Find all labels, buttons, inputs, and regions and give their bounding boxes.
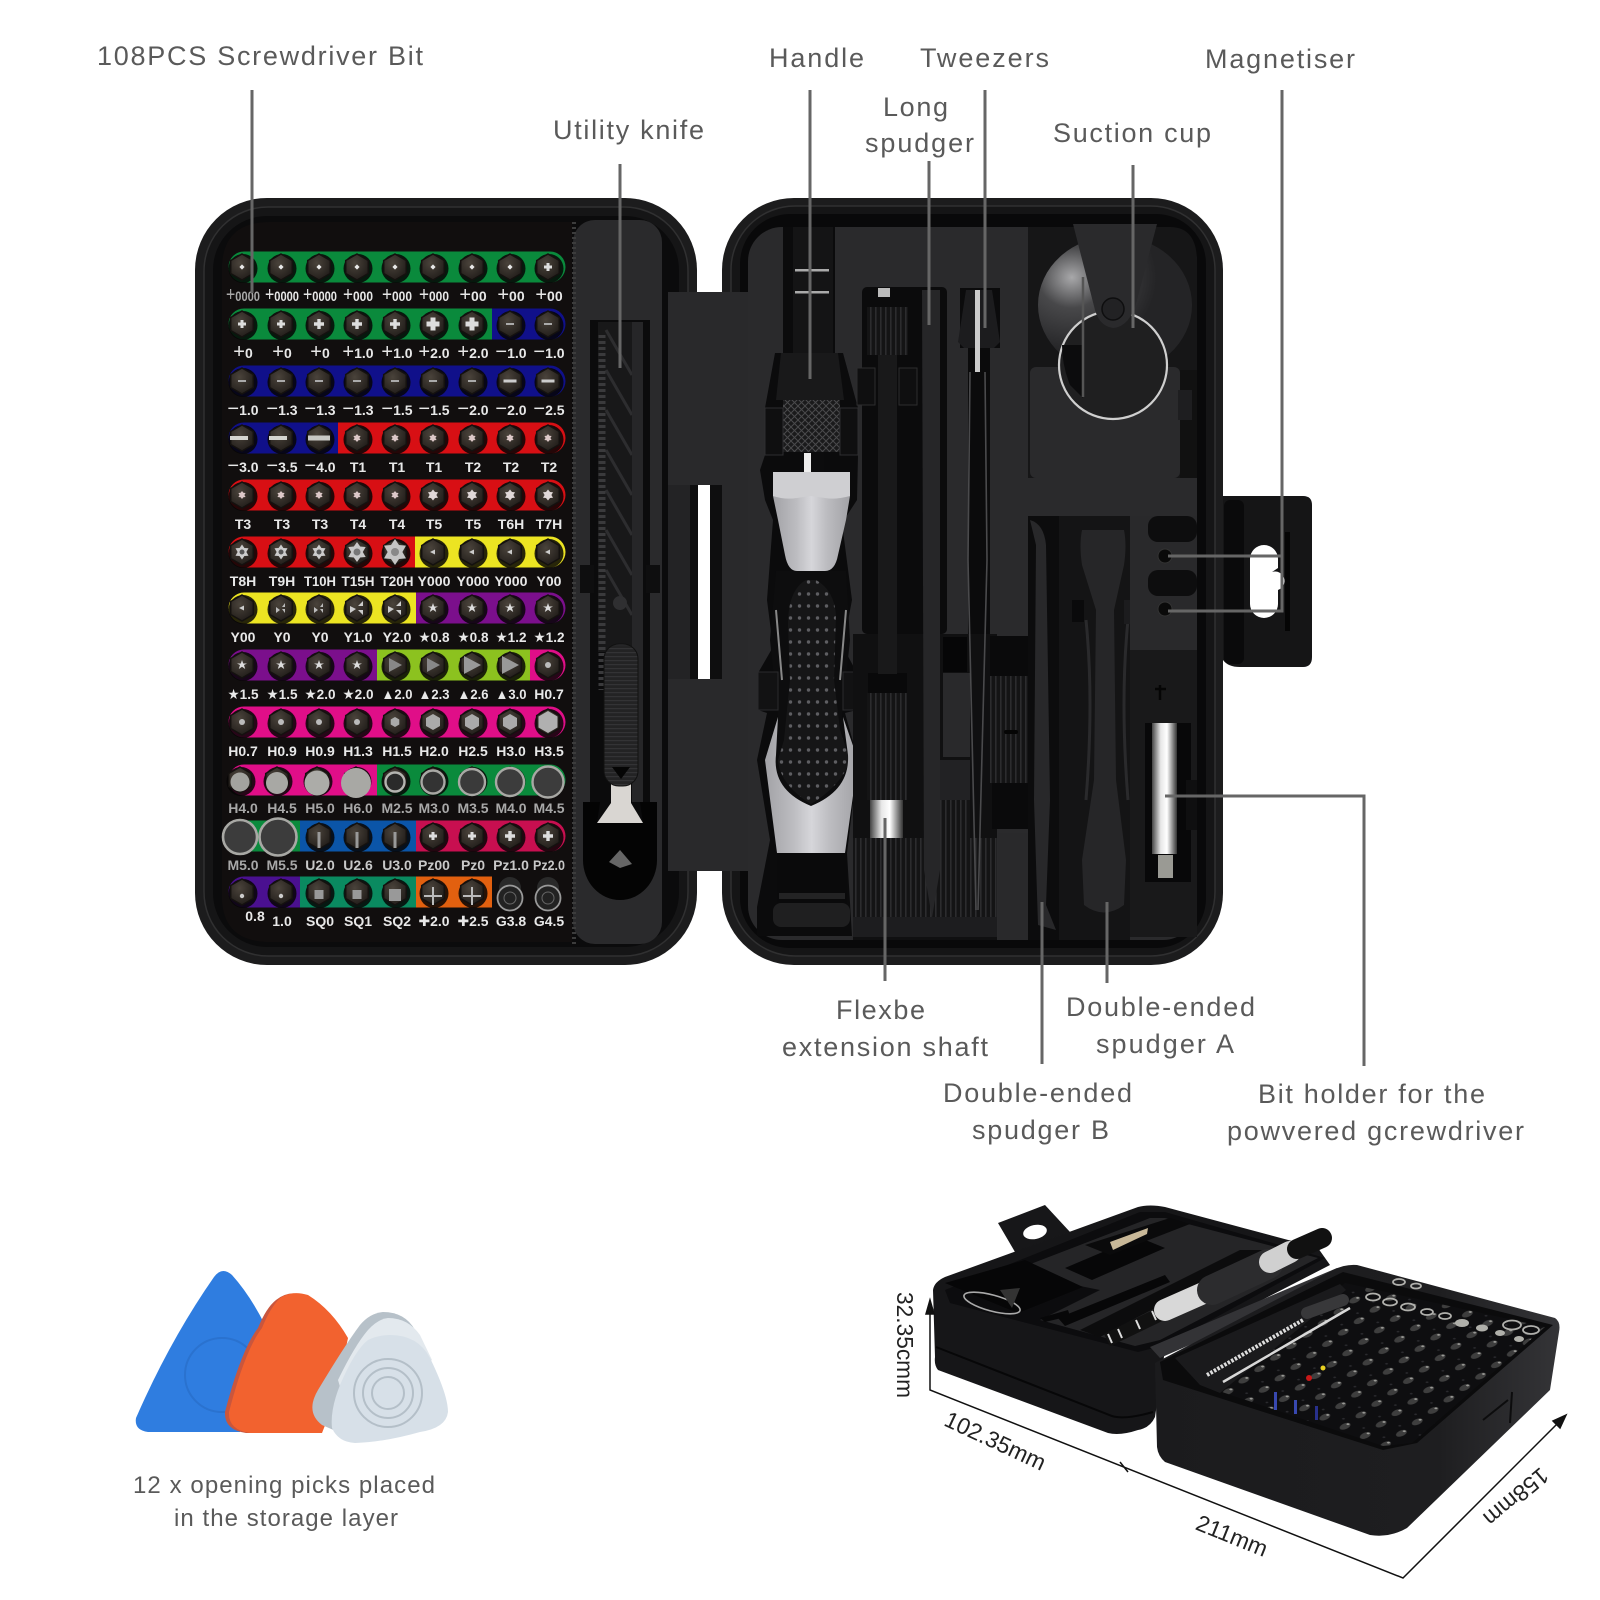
screwdriver pocket [757, 227, 858, 936]
dimension: depth left: 102.35mm [941, 1406, 1050, 1475]
bit size labels: T4 [350, 516, 366, 532]
bit size labels: T1 [389, 459, 405, 475]
spudger A pocket [1059, 516, 1138, 940]
bit size labels: −1.3 [266, 398, 298, 420]
bit size labels: +2.0 [457, 341, 489, 363]
bit size labels: −1.0 [227, 398, 259, 420]
bit size labels: +00 [497, 284, 525, 306]
label: long spudger: Long [883, 92, 948, 122]
bit size labels: ★1.5 [266, 686, 298, 702]
bit size labels: +1.0 [381, 341, 413, 363]
bit size labels: U3.0 [382, 857, 412, 873]
bit size labels: T1 [426, 459, 442, 475]
bit size labels: ▲2.3 [418, 686, 450, 702]
bit size labels: Y00 [537, 573, 562, 589]
icon: opening picks [136, 1271, 448, 1443]
panel: left case (bit tray) [195, 198, 697, 965]
bit size labels: −1.5 [418, 398, 450, 420]
bit size labels: G4.5 [534, 913, 564, 929]
suction cup compartment [1028, 224, 1197, 516]
dimension: height: 32.35cmm [892, 1292, 918, 1398]
bit size labels: M3.5 [457, 800, 489, 816]
bit size labels: −3.5 [266, 455, 298, 477]
bit size labels: +00 [535, 284, 563, 306]
bit size labels: ✚2.0 [418, 913, 450, 929]
bit size labels: Pz00 [418, 857, 450, 873]
bit size labels: T2 [465, 459, 481, 475]
mid column pockets [990, 636, 1028, 940]
bit size labels [226, 284, 565, 929]
bit size labels: −1.3 [304, 398, 336, 420]
bit heads [223, 254, 564, 910]
bit size labels: −1.0 [533, 341, 565, 363]
bit size labels: T6H [498, 516, 524, 532]
bit size labels: +0 [233, 341, 253, 363]
label: magnetiser: Magnetiser [1205, 44, 1355, 74]
bit size labels: H0.9 [305, 743, 335, 759]
bit size labels: ★1.2 [496, 629, 527, 645]
bit size labels: M5.0 [227, 857, 259, 873]
bit size labels: H4.0 [228, 800, 258, 816]
bit size labels: T3 [274, 516, 290, 532]
bit size labels: Y00 [231, 629, 256, 645]
bit size labels: M4.5 [533, 800, 565, 816]
bit size labels: −1.5 [381, 398, 413, 420]
label: bit holder: Bit holder for the [1258, 1079, 1485, 1109]
bit size labels: H3.0 [496, 743, 526, 759]
bit size labels: +000 [382, 284, 412, 306]
dimension: depth right: 158mm [1478, 1463, 1554, 1532]
flexible shaft and long spudger pocket [853, 287, 997, 940]
caption: opening picks: 12 x opening picks placed [133, 1472, 435, 1499]
bit size labels: −1.0 [495, 341, 527, 363]
label: long spudger [865, 92, 974, 158]
bit size labels: Y1.0 [344, 629, 373, 645]
bit size labels: Y000 [418, 573, 451, 589]
label: bit holder: powvered gcrewdriver [1227, 1116, 1524, 1146]
bit size labels: −2.0 [495, 398, 527, 420]
bit size labels: +0000 [265, 284, 299, 306]
spudger B pocket [1028, 516, 1059, 940]
label: flexible extension shaft [782, 995, 988, 1062]
bit size labels: H1.5 [382, 743, 412, 759]
bit size labels: ✚2.5 [458, 913, 489, 929]
bit size labels: ★2.0 [342, 686, 374, 702]
screwdriver handle [758, 227, 858, 927]
bit size labels: +000 [343, 284, 373, 306]
label: bit set: 108PCS Screwdriver Bit [97, 41, 423, 71]
bit size labels: Y2.0 [383, 629, 412, 645]
bit size labels: SQ0 [306, 913, 334, 929]
bit size labels: −1.3 [342, 398, 374, 420]
bit size labels: U2.0 [305, 857, 335, 873]
label: utility knife: Utility knife [553, 115, 704, 145]
bit size labels: ★0.8 [458, 629, 489, 645]
bit size labels: T5 [465, 516, 481, 532]
label: flexible extension shaft: Flexbe [836, 995, 925, 1025]
bit size labels: M3.0 [418, 800, 450, 816]
bit size labels: T1 [350, 459, 366, 475]
bit size labels: +000 [419, 284, 449, 306]
bit size labels: SQ2 [383, 913, 411, 929]
bit size labels: Pz2.0 [533, 857, 565, 873]
bit size labels: T10H [304, 573, 336, 589]
bit size labels: −3.0 [227, 455, 259, 477]
bit size labels: +1.0 [342, 341, 374, 363]
bit size labels: ▲2.0 [382, 686, 413, 702]
bit size labels: ★0.8 [418, 629, 450, 645]
bit size labels: H1.3 [343, 743, 373, 759]
bit size labels: +00 [459, 284, 487, 306]
magnetiser panel [1130, 516, 1197, 650]
label: spudger A: Double-ended [1066, 992, 1255, 1022]
hanging tag [1223, 496, 1312, 667]
callout lines [252, 90, 1364, 1066]
bit size labels: U2.6 [343, 857, 373, 873]
bit size labels: +0 [310, 341, 330, 363]
bit size labels: H2.0 [419, 743, 449, 759]
colour bands behind the bits [228, 252, 565, 908]
bit size labels: Y0 [273, 629, 291, 645]
bit size labels: 1.0 [272, 913, 292, 929]
bit size labels: H6.0 [343, 800, 373, 816]
bit size labels: ★1.2 [534, 629, 565, 645]
bit size labels: +0000 [303, 284, 337, 306]
bit size labels: H2.5 [458, 743, 488, 759]
caption: opening picks: in the storage layer [174, 1505, 398, 1532]
bit size labels: Pz1.0 [493, 857, 529, 873]
bit size labels: T2 [503, 459, 519, 475]
bit size labels: H5.0 [305, 800, 335, 816]
label: flexible extension shaft: extension shaft [782, 1032, 988, 1062]
bit size labels: T8H [230, 573, 256, 589]
bit holder [1130, 650, 1197, 937]
bit size labels: T9H [269, 573, 295, 589]
bit size labels: ★2.0 [304, 686, 336, 702]
utility knife in its pocket [580, 320, 660, 900]
label: tweezers: Tweezers [920, 43, 1049, 73]
bit size labels: H0.7 [228, 743, 258, 759]
bit size labels: T20H [380, 573, 414, 589]
caption: opening picks [133, 1472, 435, 1532]
panel: right case (tool tray) [722, 198, 1223, 965]
bit size labels: H4.5 [267, 800, 297, 816]
bit size labels: T7H [536, 516, 562, 532]
bit size labels: T2 [541, 459, 557, 475]
label: bit holder [1227, 1079, 1524, 1146]
label: suction cup: Suction cup [1053, 118, 1211, 148]
label: spudger B: Double-ended [943, 1078, 1132, 1108]
bit size labels: T5 [426, 516, 442, 532]
bit size labels: 0.8 [245, 908, 265, 924]
product photo: open case [933, 1205, 1560, 1536]
bit size labels: M4.0 [495, 800, 527, 816]
bit size labels: T3 [312, 516, 328, 532]
hinge between the two halves [668, 292, 745, 871]
bit size labels: T4 [389, 516, 405, 532]
bit size labels: Pz0 [461, 857, 485, 873]
bit size labels: −2.5 [533, 398, 565, 420]
label: spudger B [943, 1078, 1132, 1145]
bit size labels: ★1.5 [228, 686, 259, 702]
bit size labels: Y000 [494, 573, 528, 589]
bit size labels: H0.7 [534, 686, 564, 702]
bit size labels: M2.5 [381, 800, 413, 816]
label: spudger A [1066, 992, 1255, 1059]
bit size labels: SQ1 [344, 913, 372, 929]
bit size labels: Y0 [311, 629, 329, 645]
label: handle: Handle [769, 43, 864, 73]
label: spudger A: spudger A [1096, 1029, 1234, 1059]
bit size labels: M5.5 [266, 857, 298, 873]
bit size labels: −4.0 [304, 455, 336, 477]
label: long spudger: spudger [865, 128, 974, 158]
label: spudger B: spudger B [972, 1115, 1109, 1145]
bit size labels: +0 [272, 341, 292, 363]
bit size labels: ▲2.6 [458, 686, 489, 702]
bit size labels: H3.5 [534, 743, 564, 759]
bit size labels: T3 [235, 516, 251, 532]
tweezers [958, 288, 1000, 910]
bit size labels: H0.9 [267, 743, 297, 759]
dimension lines [926, 1300, 1566, 1578]
bit size labels: T15H [342, 573, 374, 589]
dimension: width: 211mm [1192, 1509, 1272, 1562]
bit size labels: G3.8 [496, 913, 526, 929]
bit size labels: +2.0 [418, 341, 450, 363]
bit size labels: +0000 [226, 284, 260, 306]
bit size labels: ▲3.0 [496, 686, 527, 702]
bit size labels: Y000 [456, 573, 490, 589]
bit size labels: −2.0 [457, 398, 489, 420]
